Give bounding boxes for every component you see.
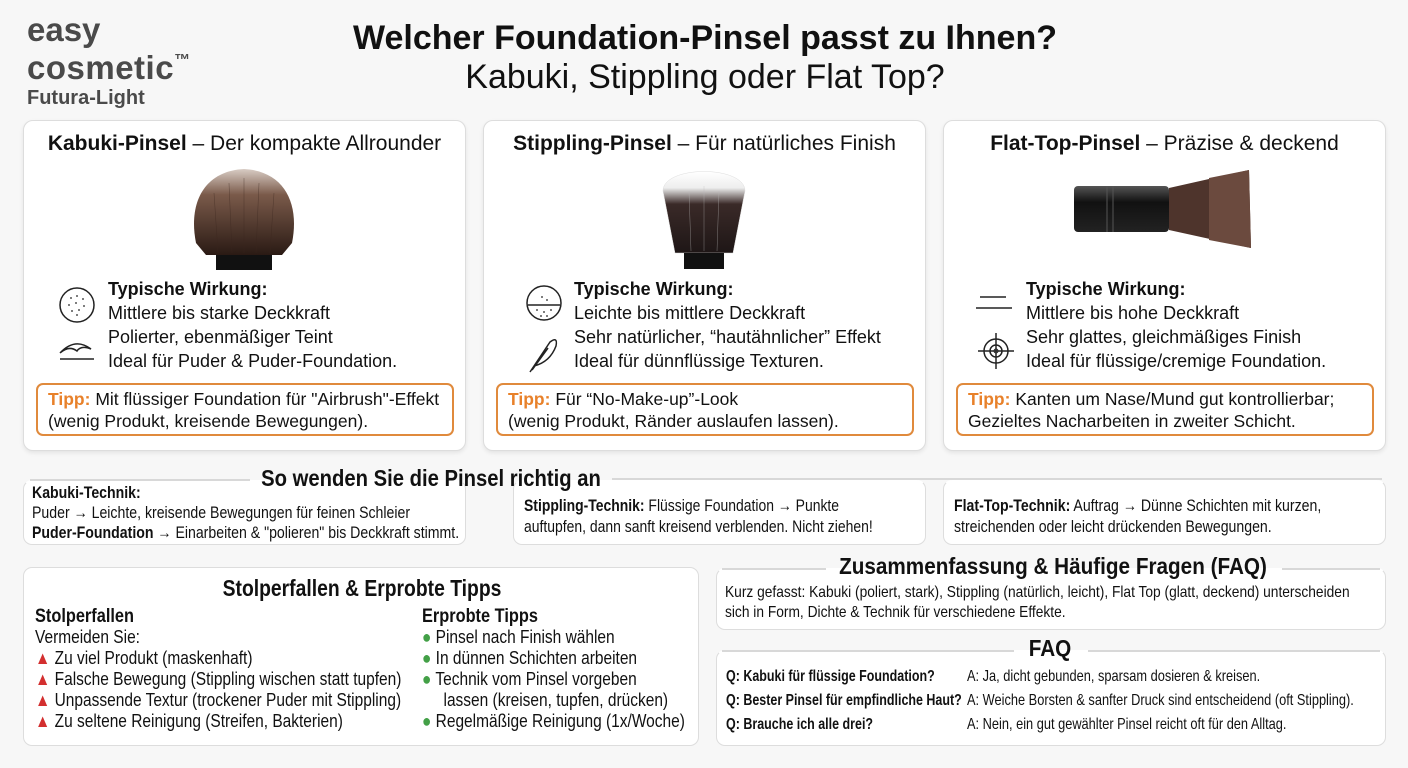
box: Kabuki technique: Kabuki-Technik: (32, 483, 141, 502)
list: tips: ● Pinsel nach Finish wählen (422, 627, 615, 647)
text: Wirkung: Ideal für Puder & Puder-Foundation. (108, 351, 397, 371)
heading: FAQ: FAQ (1029, 635, 1071, 661)
heading: Flat Top: Flat-Top-Pinsel – Präzise & deckend (990, 132, 1339, 155)
box: Stippling technique: auftupfen, dann sanft kreisend verblenden. Nicht ziehen! (524, 517, 873, 536)
icon: eye/wave (60, 343, 94, 360)
box: FAQ (716, 650, 1386, 746)
list: pitfalls: Stolperfallen (35, 606, 134, 627)
heading: Kabuki: Kabuki-Pinsel – Der kompakte Allrounder (48, 132, 441, 155)
logo: Futura-Light (27, 87, 145, 109)
text: Wirkung (1026, 279, 1326, 371)
box: FAQ: A: Weiche Borsten & sanfter Druck sind entscheidend (oft Stippling). (967, 692, 1354, 709)
tip box: (wenig Produkt, Ränder auslaufen lassen). (508, 411, 839, 431)
panel: Flat Top (943, 120, 1386, 451)
text: Wirkung: Ideal für dünnflüssige Texturen. (574, 351, 824, 371)
box: Stippling technique: Stippling-Technik: Flüssige Foundation → Punkte (524, 496, 839, 515)
tip box (496, 383, 914, 436)
title: Welcher Foundation-Pinsel passt zu Ihnen? (353, 19, 1057, 57)
icon: lines (976, 296, 1012, 309)
list: pitfalls: ▲ Zu seltene Reinigung (Streifen, Bakterien) (35, 711, 343, 731)
box: Kabuki technique: Puder → Leichte, kreisende Bewegungen für feinen Schleier (32, 503, 410, 522)
box: summary (716, 568, 1386, 630)
text: Wirkung: Sehr natürlicher, “hautähnlicher” Effekt (574, 327, 881, 347)
list: pitfalls: Vermeiden Sie: (35, 627, 140, 647)
list: tips: ● Technik vom Pinsel vorgeben (422, 669, 637, 689)
tip box: (wenig Produkt, kreisende Bewegungen). (48, 411, 368, 431)
text: Wirkung (574, 279, 881, 371)
text: Wirkung: Sehr glattes, gleichmäßiges Finish (1026, 327, 1301, 347)
brush: flat top (1074, 170, 1251, 248)
icon: feather (529, 339, 558, 372)
text: Wirkung: Mittlere bis starke Deckkraft (108, 303, 330, 323)
box: Flat Top technique (943, 480, 1386, 545)
box: Flat Top technique: streichenden oder leicht drückenden Bewegungen. (954, 517, 1272, 536)
box: Kabuki technique: Puder-Foundation → Einarbeiten & "polieren" bis Deckkraft stimmt. (32, 523, 459, 542)
box: Kabuki technique (23, 480, 466, 545)
text: Wirkung: Leichte bis mittlere Deckkraft (574, 303, 805, 323)
text: Wirkung: Ideal für flüssige/cremige Foundation. (1026, 351, 1326, 371)
text: Wirkung: Typische Wirkung: (108, 279, 268, 299)
panel: pitfalls & tips (23, 567, 699, 746)
box: FAQ: Q: Brauche ich alle drei? (726, 716, 873, 733)
panel: Stippling (483, 120, 926, 451)
logo: cosmetic™ (27, 49, 191, 86)
text: Wirkung: Typische Wirkung: (574, 279, 734, 299)
list: tips: lassen (kreisen, tupfen, drücken) (444, 690, 668, 710)
box: summary: sich in Form, Dichte & Technik für verschiedene Effekte. (725, 604, 1066, 621)
text: Wirkung: Polierter, ebenmäßiger Teint (108, 327, 333, 347)
icon: target (978, 333, 1014, 369)
heading: technique: So wenden Sie die Pinsel richtig an (261, 465, 601, 491)
heading: pitfalls: Stolperfallen & Erprobte Tipps (223, 575, 501, 601)
logo: easy (27, 11, 100, 48)
icon: half-dotted circle (526, 285, 562, 321)
box: FAQ: A: Nein, ein gut gewählter Pinsel reicht oft für den Alltag. (967, 716, 1286, 733)
box: Flat Top technique: Flat-Top-Technik: Auftrag → Dünne Schichten mit kurzen, (954, 496, 1321, 515)
box: FAQ: Q: Bester Pinsel für empfindliche Haut? (726, 692, 962, 709)
text: Wirkung (108, 279, 397, 371)
tip box (956, 383, 1374, 436)
tip box: Gezieltes Nacharbeiten in zweiter Schicht. (968, 411, 1296, 431)
icon: dotted circle (59, 287, 95, 323)
list: pitfalls: ▲ Unpassende Textur (trockener Puder mit Stippling) (35, 690, 401, 710)
heading: summary: Zusammenfassung & Häufige Fragen (FAQ) (839, 553, 1267, 579)
box: FAQ: Q: Kabuki für flüssige Foundation? (726, 668, 935, 685)
title (353, 19, 1057, 96)
panel: Kabuki (23, 120, 466, 451)
tip box: Tipp: Für “No-Make-up”-Look (508, 389, 738, 409)
list: tips (422, 606, 685, 731)
list: pitfalls (35, 606, 401, 731)
brush: stippling (662, 171, 746, 269)
brush: kabuki (194, 169, 294, 270)
list: tips: Erprobte Tipps (422, 606, 538, 627)
box: FAQ: A: Ja, dicht gebunden, sparsam dosieren & kreisen. (967, 668, 1260, 685)
tip box: Tipp: Mit flüssiger Foundation für "Airbrush"-Effekt (48, 389, 439, 409)
text: Wirkung: Typische Wirkung: (1026, 279, 1186, 299)
list: tips: ● In dünnen Schichten arbeiten (422, 648, 637, 668)
title: Kabuki, Stippling oder Flat Top? (465, 58, 945, 96)
box: summary: Kurz gefasst: Kabuki (poliert, stark), Stippling (natürlich, leicht), Flat Top (glatt, deckend) unterscheiden (725, 584, 1350, 601)
tip box: Tipp: Kanten um Nase/Mund gut kontrollierbar; (968, 389, 1334, 409)
box: Stippling technique (513, 480, 926, 545)
tip box (36, 383, 454, 436)
list: pitfalls: ▲ Falsche Bewegung (Stippling wischen statt tupfen) (35, 669, 401, 689)
list: pitfalls: ▲ Zu viel Produkt (maskenhaft) (35, 648, 253, 668)
logo (27, 11, 191, 109)
heading: Stippling: Stippling-Pinsel – Für natürliches Finish (513, 132, 896, 155)
text: Wirkung: Mittlere bis hohe Deckkraft (1026, 303, 1239, 323)
list: tips: ● Regelmäßige Reinigung (1x/Woche) (422, 711, 685, 731)
